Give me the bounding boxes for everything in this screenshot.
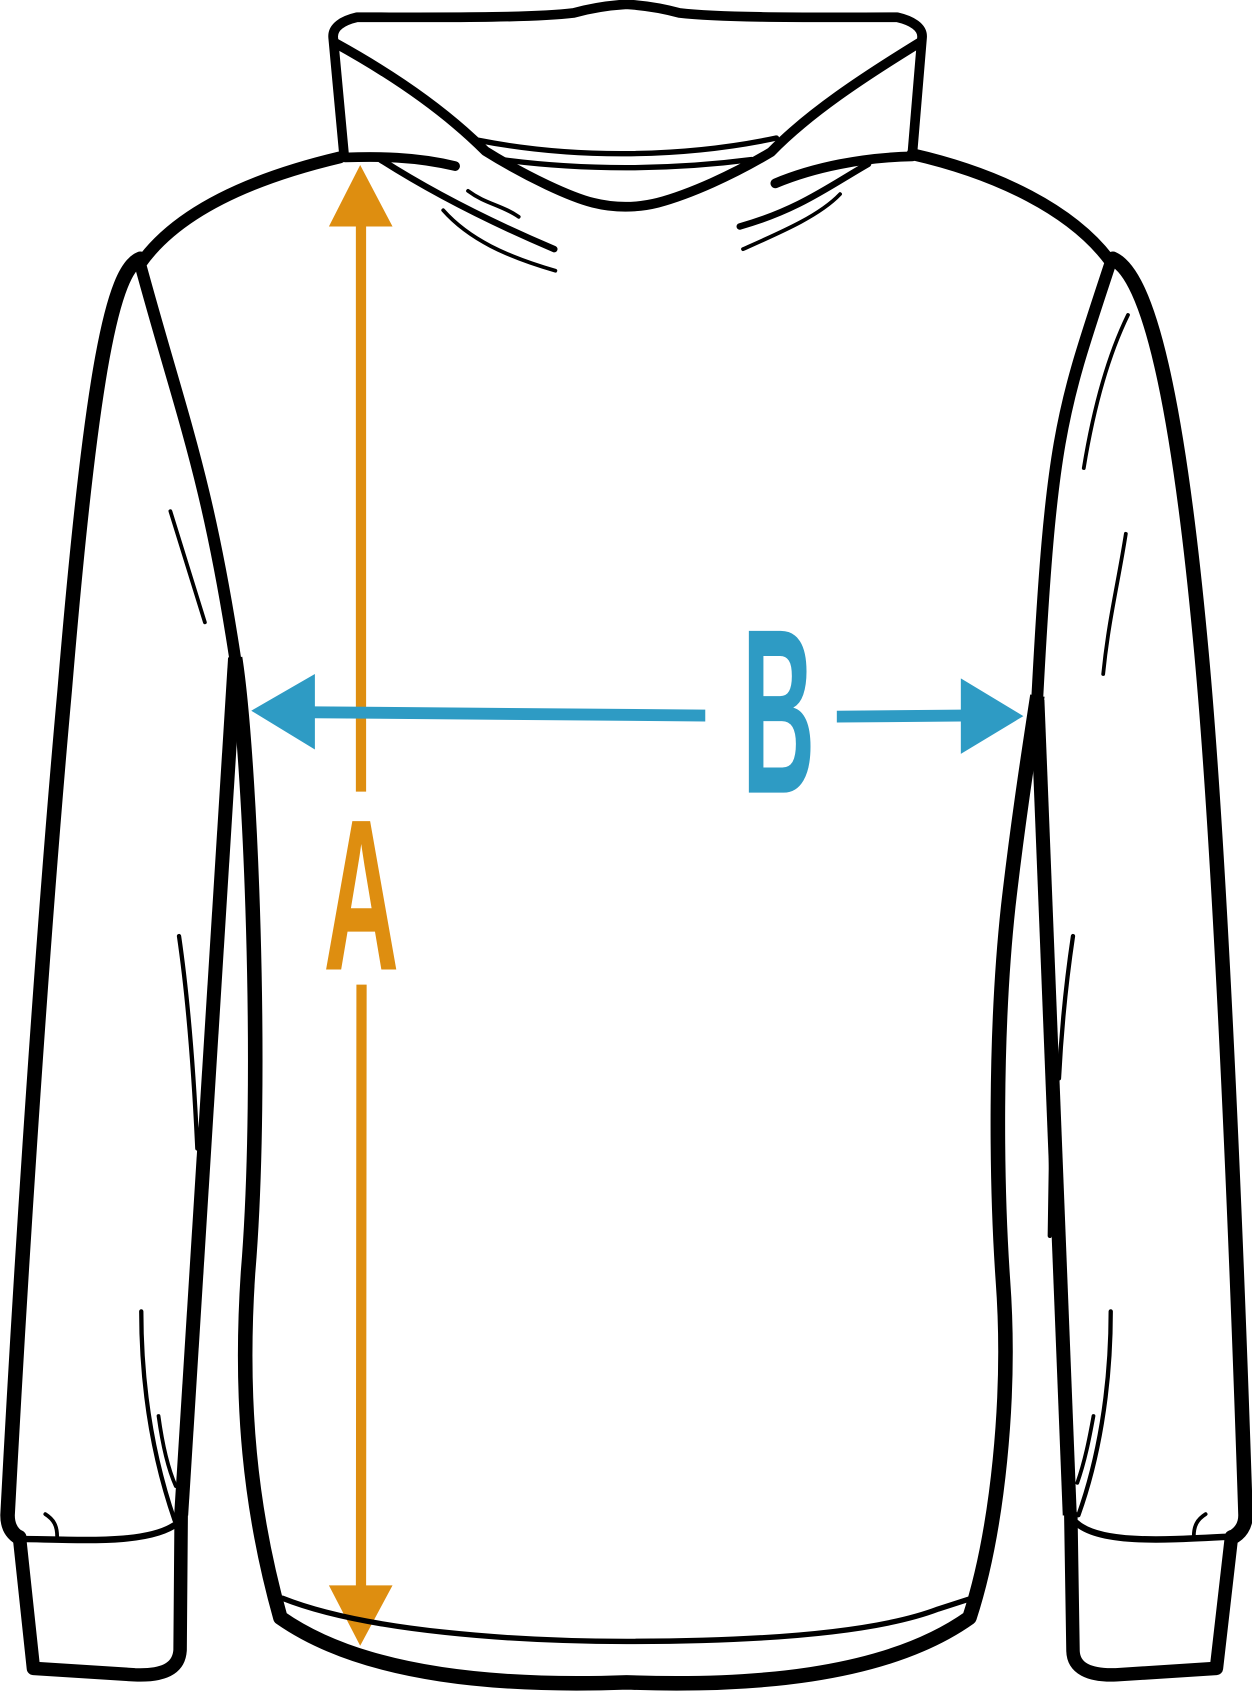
measurement A: garment length (orange) [323, 165, 399, 1646]
arrow: B pointing left [251, 674, 705, 750]
arrow: A upper segment [329, 165, 393, 792]
right sleeve [1037, 259, 1246, 1539]
left cuff [19, 1515, 181, 1675]
hem line [283, 1598, 968, 1641]
body outline [235, 658, 1037, 1683]
right cuff [1071, 1515, 1232, 1675]
left sleeve [8, 259, 235, 1540]
arrow: B pointing right [837, 678, 1023, 754]
neck folds [345, 156, 912, 271]
shoulders and armhole seams [140, 154, 1111, 696]
arrow: A lower segment [329, 985, 393, 1646]
label: B: B [742, 581, 815, 843]
collar [333, 4, 922, 207]
measurement B: chest width (blue) [251, 581, 1023, 843]
label: A: A [323, 775, 399, 1015]
